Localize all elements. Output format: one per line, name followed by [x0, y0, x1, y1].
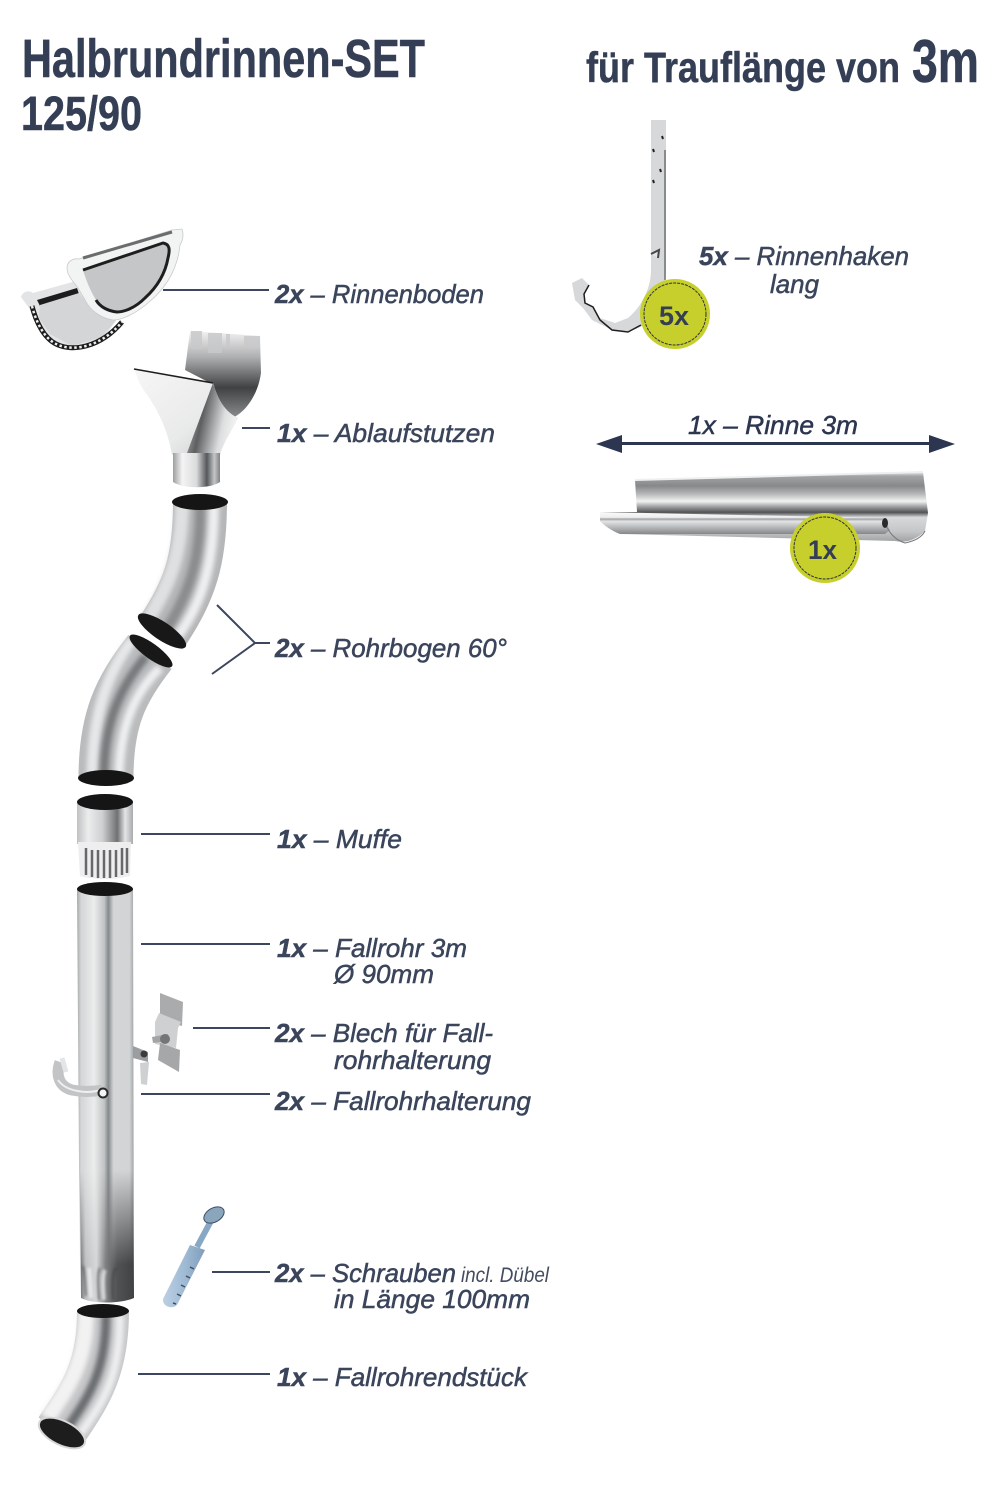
leader: wall plate	[193, 1027, 270, 1029]
part: gutter end caps	[21, 229, 183, 350]
leader: screw	[212, 1271, 270, 1273]
label: gutter hooks	[699, 241, 909, 299]
part: socket	[77, 794, 133, 879]
badge: 5x	[640, 279, 710, 349]
label: screws: 2x – Schrauben	[274, 1258, 456, 1288]
label: clamp: 2x – Fallrohrhalterung	[274, 1086, 532, 1116]
part: downpipe	[77, 882, 134, 1302]
leader: downpipe	[141, 943, 270, 945]
leader: end piece	[138, 1373, 270, 1375]
label: bends: 2x – Rohrbogen 60°	[274, 633, 507, 663]
part: pipe clamp	[58, 1058, 108, 1098]
label: wall plate	[274, 1018, 493, 1075]
leader: outlet	[242, 427, 270, 429]
label: screws: incl. Dübel	[461, 1264, 550, 1287]
label: gutter hooks: lang	[770, 269, 820, 299]
label: screws	[274, 1258, 550, 1314]
part: gutter	[600, 472, 928, 543]
badge: 1x: 1x	[808, 535, 837, 565]
title: Halbrundrinnen-SET	[22, 29, 425, 89]
heading: eaves length: 3m	[912, 28, 979, 95]
part: outlet funnel	[134, 331, 261, 487]
label: wall plate: rohrhalterung	[334, 1045, 492, 1075]
leader: socket	[141, 833, 270, 835]
label: gutter hooks: 5x – Rinnenhaken	[699, 241, 909, 271]
badge: 5x: 5x	[659, 301, 689, 331]
label: end caps: 2x – Rinnenboden	[274, 279, 484, 309]
heading: eaves length	[586, 28, 979, 95]
label: socket: 1x – Muffe	[277, 824, 402, 854]
label: end piece: 1x – Fallrohrendstück	[277, 1362, 529, 1392]
label: downpipe: 1x – Fallrohr 3m	[277, 933, 467, 963]
label: wall plate: 2x – Blech für Fall-	[274, 1018, 493, 1048]
part: long gutter hook	[572, 120, 666, 332]
label: downpipe	[277, 933, 467, 989]
part: upper 60 degree bend	[133, 494, 228, 654]
part: lower 60 degree bend	[78, 630, 176, 786]
subtitle: size 125/90: 125/90	[21, 88, 142, 141]
part: wall plate bracket	[133, 993, 183, 1085]
label: gutter 3 m: 1x – Rinne 3m	[688, 410, 858, 440]
part: downpipe end piece	[34, 1304, 129, 1455]
label: outlet: 1x – Ablaufstutzen	[277, 418, 495, 448]
heading: eaves length: für Trauflänge von	[586, 44, 900, 92]
leader: end caps	[163, 289, 269, 291]
badge: 1x	[790, 513, 860, 583]
part: screw with wall plug	[163, 1203, 227, 1307]
front end cap	[67, 229, 183, 320]
back end cap	[21, 281, 122, 350]
leader: clamp	[141, 1093, 270, 1095]
arrow: gutter length	[596, 435, 955, 453]
leader: bends bracket	[212, 605, 270, 674]
label: downpipe: Ø 90mm	[333, 959, 434, 989]
label: screws: in Länge 100mm	[334, 1284, 530, 1314]
